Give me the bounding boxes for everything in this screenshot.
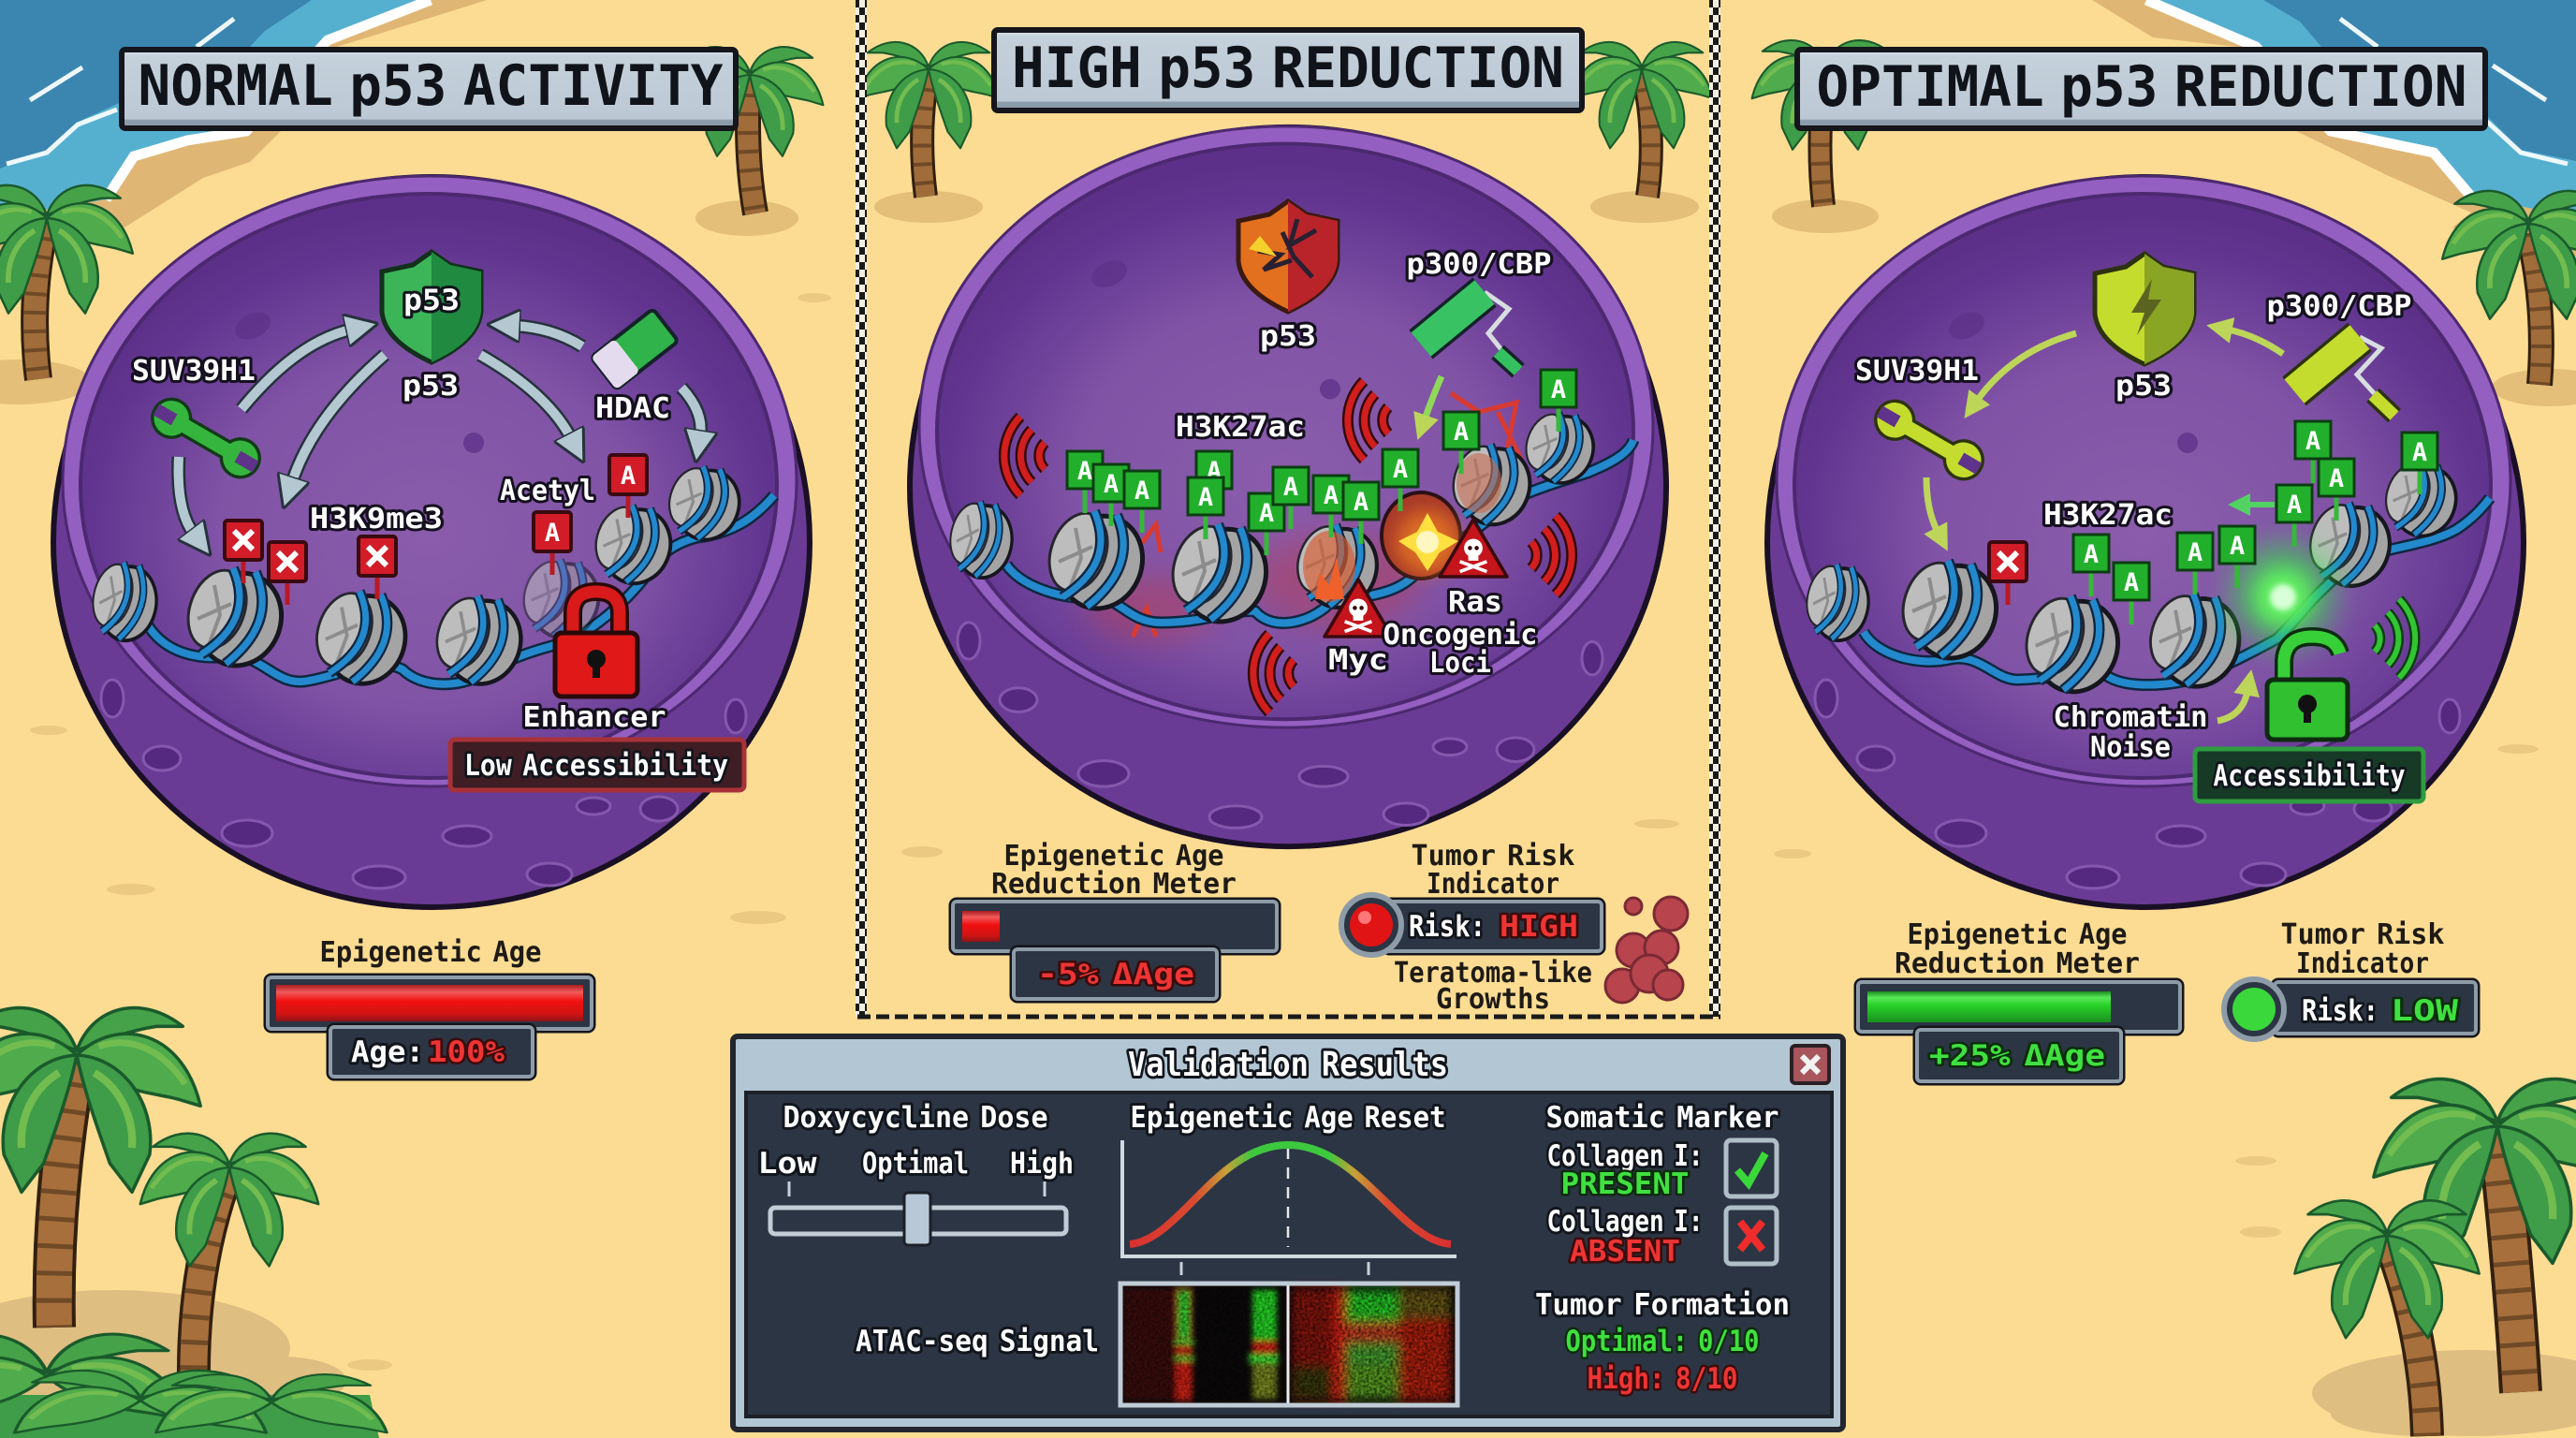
badge: low accessibility: Low Accessibility	[464, 749, 728, 783]
palm tree: middle right	[1571, 42, 1713, 223]
meter: epigenetic age reduction: -5% ΔAge	[1037, 958, 1194, 991]
flags: H3K27ac markers: A	[1198, 483, 1213, 512]
flags: H3K9me3 markers: A	[621, 462, 636, 491]
indicator: tumor risk high: Risk:	[1409, 910, 1486, 944]
flags: H3K27ac markers: A	[1207, 457, 1222, 486]
label: Enhancer: Enhancer	[522, 701, 666, 734]
block: tumor formation: Tumor Formation	[1535, 1288, 1790, 1322]
nucleus: right	[1767, 176, 2524, 907]
label: p53: p53	[1260, 320, 1316, 353]
title: high p53 reduction: HIGH p53 REDUCTION	[1012, 36, 1564, 101]
palm shadows: bottom corners	[0, 1290, 2576, 1436]
flags: H3K27ac markers: A	[1454, 418, 1469, 447]
close button	[1792, 1046, 1829, 1083]
block: somatic marker: Collagen I:	[1546, 1205, 1704, 1239]
label: oncogenic loci: Oncogenic	[1383, 619, 1537, 652]
nucleus: left	[53, 176, 810, 907]
indicator: tumor risk low: LOW	[2391, 994, 2458, 1028]
flags: H3K27ac markers: A	[1393, 455, 1408, 484]
block: somatic marker	[1546, 1101, 1778, 1269]
label: Myc: Myc	[1328, 644, 1388, 677]
label: SUV39H1: SUV39H1	[1855, 355, 1979, 388]
flags: H3K27ac markers: A	[1134, 477, 1149, 506]
palm tree: bottom left large	[0, 1008, 200, 1328]
flags: H3K9me3 markers: A	[545, 519, 560, 548]
icon: green unlocked lock	[2267, 637, 2348, 740]
icon: teratoma cluster	[1605, 897, 1688, 1003]
p53 shield yellow	[2095, 254, 2194, 364]
flags: markers: A	[2329, 464, 2344, 493]
block: somatic marker: ABSENT	[1570, 1235, 1680, 1269]
label: HDAC: HDAC	[595, 392, 670, 425]
inner dark panel	[746, 1093, 1832, 1416]
block: tumor formation: Optimal: 0/10	[1565, 1325, 1760, 1358]
meter: epigenetic age	[268, 936, 592, 1077]
label: chromatin noise	[2054, 701, 2207, 764]
label: ATAC-seq signal: ATAC-seq Signal	[856, 1325, 1099, 1358]
meter: epigenetic age reduction: +25% ΔAge	[1929, 1039, 2105, 1073]
label: Acetyl: Acetyl	[500, 475, 595, 507]
cycle arrows	[179, 326, 701, 534]
bushes: bottom left	[0, 1334, 387, 1438]
block: somatic marker: Collagen I:	[1546, 1139, 1704, 1173]
label: H3K27ac: H3K27ac	[2043, 499, 2173, 532]
flags: H3K27ac markers: A	[1283, 473, 1298, 502]
chart: epigenetic age reset	[1122, 1101, 1456, 1275]
arrow: green	[2247, 502, 2275, 507]
meter: epigenetic age reduction: Epigenetic Age	[1908, 918, 2127, 951]
meter: epigenetic age reduction: Reduction Meter	[1895, 947, 2140, 980]
flags: markers: A	[2188, 538, 2203, 567]
block: somatic marker: PRESENT	[1561, 1167, 1689, 1201]
nucleus: middle	[910, 126, 1666, 846]
flags: markers: A	[2287, 491, 2302, 520]
chart: epigenetic age reset: Epigenetic Age Reset	[1131, 1101, 1445, 1135]
window frame	[733, 1036, 1843, 1430]
flags: markers: A	[2084, 540, 2099, 569]
meter: epigenetic age reduction	[1858, 918, 2180, 1081]
badge: accessibility: Accessibility	[2213, 759, 2406, 793]
label: H3K9me3: H3K9me3	[310, 503, 443, 536]
block: tumor formation: High: 8/10	[1588, 1362, 1737, 1396]
icon: red lock	[555, 592, 637, 697]
icon: paint roller yellow	[2294, 337, 2394, 416]
palm tree: far left	[0, 185, 133, 404]
indicator: tumor risk low	[2224, 918, 2476, 1039]
icon: paint roller green	[1421, 292, 1518, 371]
control: doxycycline dose slider: Optimal	[862, 1147, 969, 1181]
palm tree: bottom left small	[140, 1134, 318, 1386]
window title: Validation Results	[1128, 1046, 1448, 1084]
indicator: tumor risk high: Indicator	[1427, 868, 1559, 901]
signal waves: green	[2375, 599, 2415, 678]
meter: epigenetic age: 100%	[428, 1035, 505, 1069]
indicator: tumor risk high	[1341, 840, 1602, 955]
meter: epigenetic age reduction	[953, 840, 1277, 999]
hazard: Ras	[1440, 520, 1507, 577]
badge: low accessibility	[450, 740, 744, 790]
meter: epigenetic age: Epigenetic Age	[320, 936, 541, 969]
palm tree: left panel right	[677, 47, 823, 236]
sand speckles	[30, 293, 2539, 1371]
label: chromatin noise: Noise	[2090, 731, 2171, 764]
icon: wrench SUV39H1	[148, 394, 264, 482]
red glow and sparks	[1086, 393, 1526, 641]
label: teratoma-like growths: Growths	[1436, 983, 1550, 1016]
label: teratoma-like growths	[1394, 957, 1592, 1016]
label: SUV39H1: SUV39H1	[132, 355, 256, 388]
flags: H3K27ac markers: A	[1104, 470, 1119, 499]
panel: optimal p53 reduction	[1767, 50, 2524, 1081]
chromatin: left	[86, 462, 774, 695]
fire burst	[1396, 510, 1459, 574]
flags: markers: A	[2230, 532, 2245, 561]
heatmap: ATAC-seq	[1120, 1284, 1457, 1405]
panel: validation results	[733, 1036, 1843, 1430]
label: H3K27ac: H3K27ac	[1176, 411, 1305, 444]
flags: markers	[1989, 421, 2437, 624]
label: oncogenic loci	[1383, 619, 1537, 680]
title: optimal p53 reduction: OPTIMAL p53 REDUCTION	[1816, 54, 2467, 120]
meter: epigenetic age reduction: Reduction Meter	[991, 868, 1237, 901]
p53 shield green: p53	[403, 284, 460, 317]
control: doxycycline dose slider	[758, 1101, 1074, 1245]
indicator: tumor risk low: Risk:	[2302, 994, 2378, 1028]
panel: high p53 reduction	[910, 30, 1688, 1016]
green glow burst	[2232, 543, 2334, 646]
palm tree: bottom right small	[2294, 1200, 2480, 1436]
icon: eraser HDAC	[591, 309, 679, 389]
label: p300/CBP: p300/CBP	[1406, 248, 1552, 281]
indicator: tumor risk high: Tumor Risk	[1412, 840, 1574, 873]
flags: markers: A	[2305, 427, 2320, 456]
title: normal p53 activity: NORMAL p53 ACTIVITY	[139, 53, 723, 119]
chromatin: middle	[944, 408, 1633, 634]
palm tree: right panel left	[1752, 40, 1898, 233]
label: Ras: Ras	[1448, 586, 1502, 619]
label: p53: p53	[2115, 370, 2172, 403]
flags: H3K27ac markers: A	[1551, 375, 1566, 404]
meter: epigenetic age: Age:	[351, 1035, 424, 1069]
p53 shield green	[382, 252, 481, 362]
p53 shield broken	[1238, 201, 1338, 312]
ocean: top left	[0, 0, 487, 262]
flags: H3K27ac markers: A	[1077, 457, 1092, 486]
checker border around middle panel	[856, 0, 1720, 1017]
ocean: top right	[2092, 0, 2576, 271]
palm tree: middle left	[857, 42, 1000, 223]
icon: wrench yellow	[1871, 396, 1987, 484]
label: chromatin noise: Chromatin	[2054, 701, 2207, 734]
chromatin: right	[1800, 458, 2490, 703]
flags: H3K27ac markers: A	[1354, 488, 1368, 517]
flags: H3K27ac markers	[1067, 370, 1576, 555]
indicator: tumor risk low: Indicator	[2296, 947, 2429, 980]
control: doxycycline dose slider: Low	[758, 1147, 817, 1181]
label: p300/CBP: p300/CBP	[2267, 290, 2411, 323]
flags: H3K27ac markers: A	[1259, 499, 1274, 528]
signal waves: red	[1004, 381, 1572, 712]
flags: H3K9me3 markers	[225, 455, 647, 605]
badge: accessibility	[2195, 749, 2423, 801]
arrows: yellow-green	[1926, 330, 2283, 721]
panel: normal p53 activity	[53, 50, 810, 1077]
palm tree: bottom right large	[2374, 1079, 2576, 1392]
label: p53: p53	[402, 370, 459, 403]
flags: H3K27ac markers: A	[1324, 481, 1339, 510]
palm tree: far right	[2442, 191, 2576, 406]
label: oncogenic loci: Loci	[1429, 647, 1491, 680]
flags: markers: A	[2412, 438, 2427, 467]
meter: epigenetic age reduction: Epigenetic Age	[1003, 840, 1224, 873]
hazard: Myc	[1325, 580, 1392, 637]
indicator: tumor risk low: Tumor Risk	[2280, 918, 2445, 951]
green arrow: down	[1425, 376, 1442, 419]
block: somatic marker: Somatic Marker	[1546, 1101, 1778, 1135]
control: doxycycline dose slider: High	[1010, 1147, 1074, 1181]
label: teratoma-like growths: Teratoma-like	[1394, 957, 1592, 990]
indicator: tumor risk high: HIGH	[1500, 910, 1578, 944]
block: tumor formation	[1535, 1288, 1790, 1396]
flags: markers: A	[2124, 568, 2139, 597]
control: doxycycline dose slider: Doxycycline Dose	[783, 1101, 1048, 1135]
